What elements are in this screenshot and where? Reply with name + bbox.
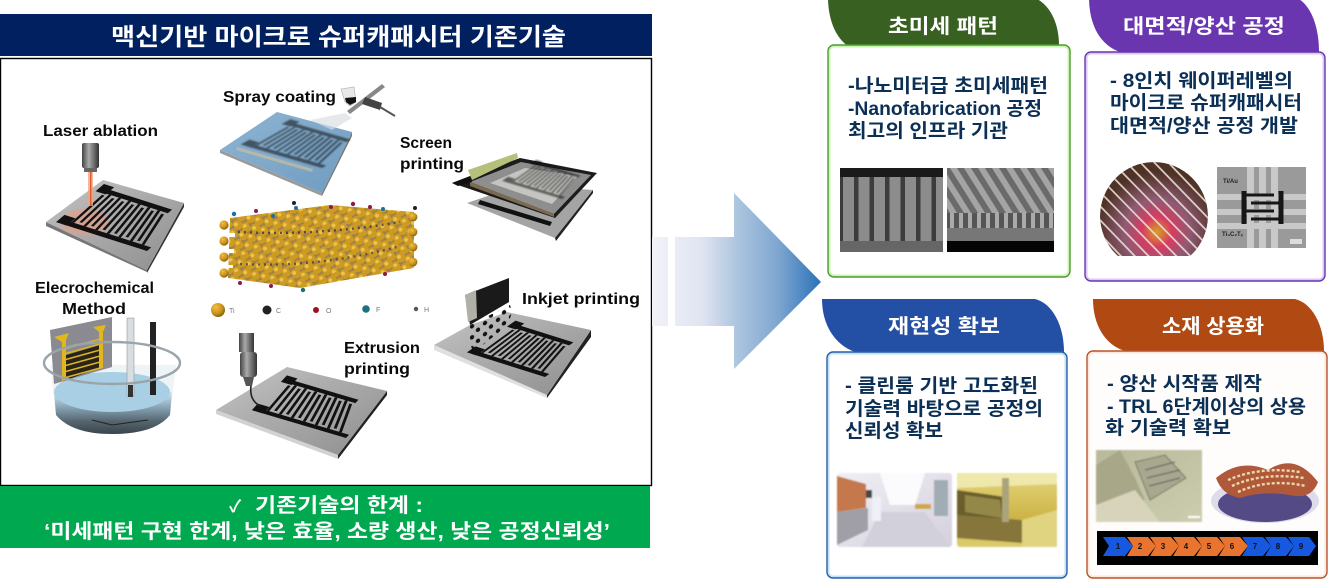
- image: micro-supercapacitor micrograph: [1217, 167, 1306, 248]
- text block: ultra-fine pattern: -Nanofabrication 공정: [848, 98, 1042, 120]
- tab heading: large-area process: 대면적/양산 공정: [1123, 15, 1285, 38]
- tab heading: commercialization: 소재 상용화: [1162, 315, 1264, 338]
- text block: reproducibility: [845, 375, 1043, 442]
- icon: screen printing device: [452, 153, 597, 241]
- chart: TRL progress chevrons: 8: [1276, 542, 1281, 551]
- chart legend: atoms: O: [326, 308, 332, 315]
- panel: ultra-fine pattern: [828, 0, 1070, 277]
- inkjet printing label: Inkjet printing: [522, 291, 640, 308]
- tab heading: ultra-fine pattern: 초미세 패턴: [888, 15, 998, 38]
- text block: ultra-fine pattern: -나노미터급 초미세패턴: [848, 75, 1048, 97]
- chart legend: atoms: H: [424, 307, 429, 314]
- chart: TRL progress chevrons: [1097, 531, 1318, 565]
- callout: limits of existing technology: 기존기술의 한계 :: [255, 494, 423, 517]
- laser ablation label: Laser ablation: [43, 123, 158, 140]
- electrochemical label: Method: [62, 301, 126, 318]
- extrusion printing label: Extrusion: [344, 340, 420, 357]
- text block: commercialization: - TRL 6단계이상의 상용: [1107, 396, 1306, 418]
- chart: TRL progress chevrons: 3: [1161, 542, 1166, 551]
- text block: commercialization: [1105, 373, 1306, 439]
- chart: TRL progress chevrons: 2: [1138, 542, 1143, 551]
- extrusion printing label: [344, 340, 420, 378]
- panel: material commercialization: [1087, 299, 1327, 578]
- electrochemical label: Elecrochemical: [35, 280, 154, 297]
- extrusion printing label: printing: [344, 361, 410, 378]
- chart: TRL progress chevrons: 7: [1253, 542, 1258, 551]
- chart legend: atoms: [211, 303, 429, 317]
- image: micro-supercapacitor micrograph: Ti/Au: [1223, 179, 1238, 185]
- chart: MXene crystal structure: [219, 201, 417, 292]
- callout: limits of existing technology: ✓: [229, 497, 242, 516]
- text block: ultra-fine pattern: 최고의 인프라 기관: [848, 120, 1008, 142]
- text block: reproducibility: 기술력 바탕으로 공정의: [845, 398, 1043, 420]
- text block: commercialization: 화 기술력 확보: [1105, 417, 1231, 439]
- panel: large-area mass production process: [1085, 0, 1325, 281]
- image: 8-inch wafer: [1100, 162, 1208, 256]
- text block: large-area process: 대면적/양산 공정 개발: [1110, 115, 1298, 137]
- tab heading: large-area process: [1089, 0, 1319, 52]
- screen printing label: printing: [400, 156, 464, 173]
- image: yellow-lit clean room: [957, 473, 1057, 547]
- chart: TRL progress chevrons: 5: [1207, 542, 1212, 551]
- icon: spray coating device: [220, 84, 395, 196]
- text block: commercialization: - 양산 시작품 제작: [1107, 373, 1262, 395]
- image: flexible device in hand: [1096, 450, 1202, 522]
- panel: reproducibility: [822, 299, 1067, 578]
- tab heading: ultra-fine pattern: [828, 0, 1059, 46]
- image: SEM trenches: [840, 168, 943, 252]
- panel: existing fabrication methods: [0, 58, 652, 486]
- image: curved wafer on stage: [1211, 463, 1319, 523]
- text block: reproducibility: 신뢰성 확보: [845, 420, 943, 442]
- icon: inkjet printing device: [434, 278, 591, 398]
- text block: reproducibility: - 클린룸 기반 고도화된: [845, 375, 1038, 397]
- title bar: 맥신기반 마이크로 슈퍼캐패시터 기존기술: [111, 24, 566, 51]
- title bar: [0, 14, 652, 56]
- image: SEM angled lines: [947, 168, 1054, 252]
- chart legend: atoms: C: [276, 308, 281, 315]
- electrochemical label: [35, 280, 154, 318]
- chart: TRL progress chevrons: 6: [1230, 542, 1235, 551]
- arrow: transition to proposed technology: [652, 193, 821, 369]
- tab heading: reproducibility: [822, 299, 1064, 352]
- screen printing label: Screen: [400, 135, 452, 152]
- text block: large-area process: 마이크로 슈퍼캐패시터: [1110, 92, 1302, 114]
- chart: TRL progress chevrons: 1: [1116, 542, 1121, 551]
- chart: TRL progress chevrons: 9: [1299, 542, 1304, 551]
- image: micro-supercapacitor micrograph: Ti₃C₂Tₓ: [1222, 232, 1244, 238]
- chart legend: atoms: F: [376, 307, 380, 314]
- text block: large-area process: - 8인치 웨이퍼레벨의: [1110, 70, 1293, 92]
- icon: laser ablation device: [46, 143, 192, 273]
- image: clean room corridor: [837, 473, 952, 547]
- tab heading: commercialization: [1093, 299, 1324, 351]
- text block: large-area process: [1110, 70, 1302, 137]
- spray coating label: Spray coating: [223, 89, 336, 106]
- screen printing label: [400, 135, 464, 173]
- icon: extrusion printing device: [216, 333, 387, 459]
- chart: TRL progress chevrons: 4: [1184, 542, 1189, 551]
- callout: limits of existing technology: ‘미세패턴 구현 한계, 낮은 효율, 소량 생산, 낮은 공정신뢰성’: [44, 520, 610, 543]
- icon: electrochemical beaker: [44, 317, 180, 434]
- text block: ultra-fine pattern: [848, 75, 1048, 142]
- callout: limits of existing technology: [0, 486, 650, 548]
- chart legend: atoms: Ti: [229, 308, 235, 315]
- tab heading: reproducibility: 재현성 확보: [888, 315, 1000, 338]
